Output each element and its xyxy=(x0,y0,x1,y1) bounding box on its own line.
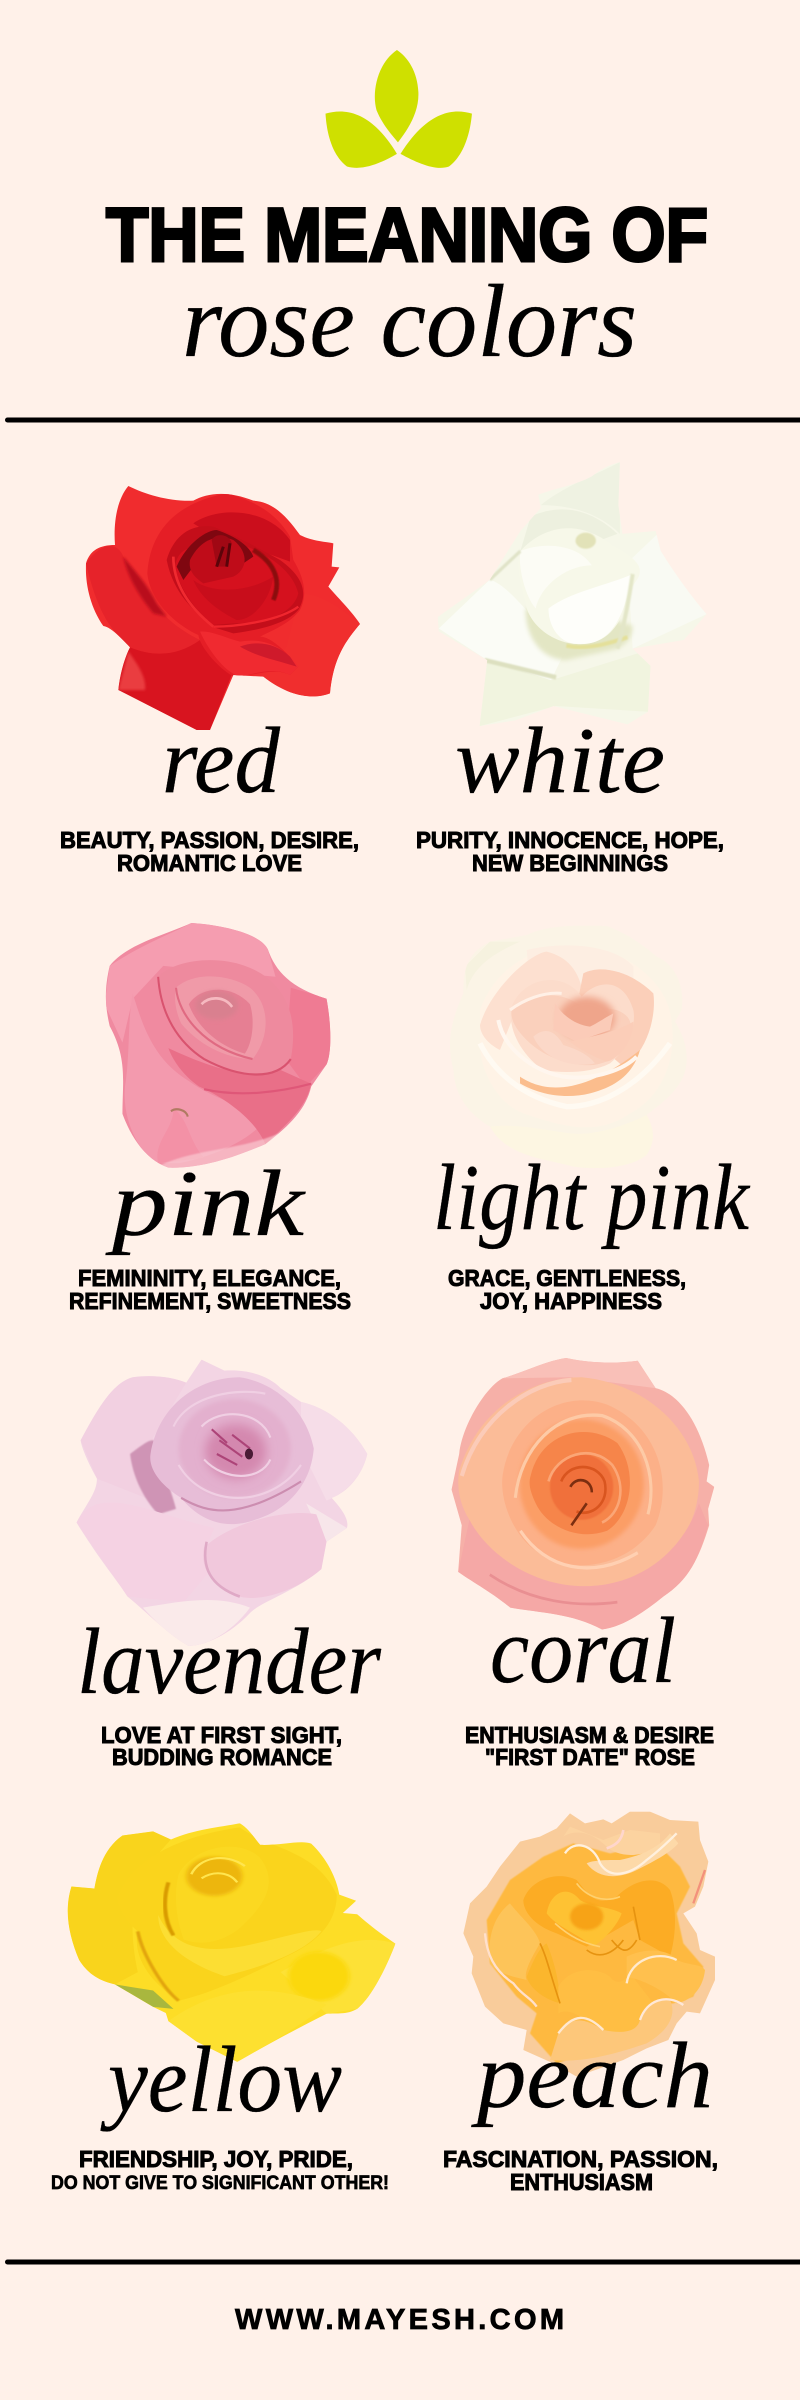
script heading line: rose colors xyxy=(182,264,637,379)
meaning text: GRACE, GENTLENESS, xyxy=(448,1265,686,1291)
icon: green leaves logo xyxy=(326,50,472,168)
panel: red xyxy=(60,480,367,876)
icon: peach rose xyxy=(460,1810,720,2080)
meaning text xyxy=(51,2146,389,2194)
label: yellow: yellow xyxy=(100,2028,342,2132)
meaning text: FASCINATION, PASSION, xyxy=(443,2146,718,2172)
meaning text xyxy=(465,1722,714,1770)
meaning text: FEMININITY, ELEGANCE, xyxy=(78,1265,341,1291)
meaning text: PURITY, INNOCENCE, HOPE, xyxy=(416,827,724,853)
panel: peach xyxy=(443,1810,720,2195)
meaning text: FRIENDSHIP, JOY, PRIDE, xyxy=(79,2146,353,2172)
meaning text: "FIRST DATE" ROSE xyxy=(485,1744,695,1770)
icon: white rose xyxy=(434,459,709,729)
panel: white xyxy=(416,459,724,876)
meaning text: JOY, HAPPINESS xyxy=(480,1288,662,1314)
icon: coral rose xyxy=(449,1355,717,1632)
meaning text: BEAUTY, PASSION, DESIRE, xyxy=(60,827,359,853)
divider: top xyxy=(5,418,800,422)
title: the meaning of rose colors xyxy=(106,193,708,379)
panel: lavender xyxy=(71,1355,381,1770)
icon: light pink rose xyxy=(466,942,672,1109)
meaning text xyxy=(416,827,724,876)
meaning text: NEW BEGINNINGS xyxy=(472,850,668,876)
meaning text: LOVE AT FIRST SIGHT, xyxy=(101,1722,342,1748)
meaning text: BUDDING ROMANCE xyxy=(112,1744,332,1770)
label: lavender: lavender xyxy=(77,1610,381,1714)
meaning text xyxy=(101,1722,342,1770)
label: light pink: light pink xyxy=(433,1146,751,1250)
meaning text: REFINEMENT, SWEETNESS xyxy=(69,1288,351,1314)
panel: coral xyxy=(449,1355,717,1770)
meaning text xyxy=(60,827,359,876)
label: coral: coral xyxy=(490,1599,676,1703)
meaning text xyxy=(69,1265,351,1314)
heading line: THE MEANING OF xyxy=(106,193,708,278)
meaning text: ROMANTIC LOVE xyxy=(117,850,302,876)
label: pink: pink xyxy=(105,1152,307,1256)
meaning text xyxy=(443,2146,718,2195)
label: red: red xyxy=(162,709,281,813)
icon: pink rose xyxy=(102,916,337,1174)
panel: light pink xyxy=(433,920,751,1314)
divider: bottom xyxy=(5,2260,800,2264)
icon: lavender rose xyxy=(71,1355,372,1651)
meaning text: ENTHUSIASM & DESIRE xyxy=(465,1722,714,1748)
panel: yellow xyxy=(51,1821,403,2194)
label: peach: peach xyxy=(471,2024,713,2128)
icon: red rose xyxy=(80,480,367,737)
icon: yellow rose xyxy=(61,1821,403,2066)
footer: website: WWW.MAYESH.COM xyxy=(235,2304,564,2336)
meaning text: ENTHUSIASM xyxy=(510,2169,653,2195)
panel: pink xyxy=(69,916,351,1314)
meaning text: DO NOT GIVE TO SIGNIFICANT OTHER! xyxy=(51,2173,389,2194)
meaning text xyxy=(448,1265,686,1314)
label: white: white xyxy=(455,709,665,813)
